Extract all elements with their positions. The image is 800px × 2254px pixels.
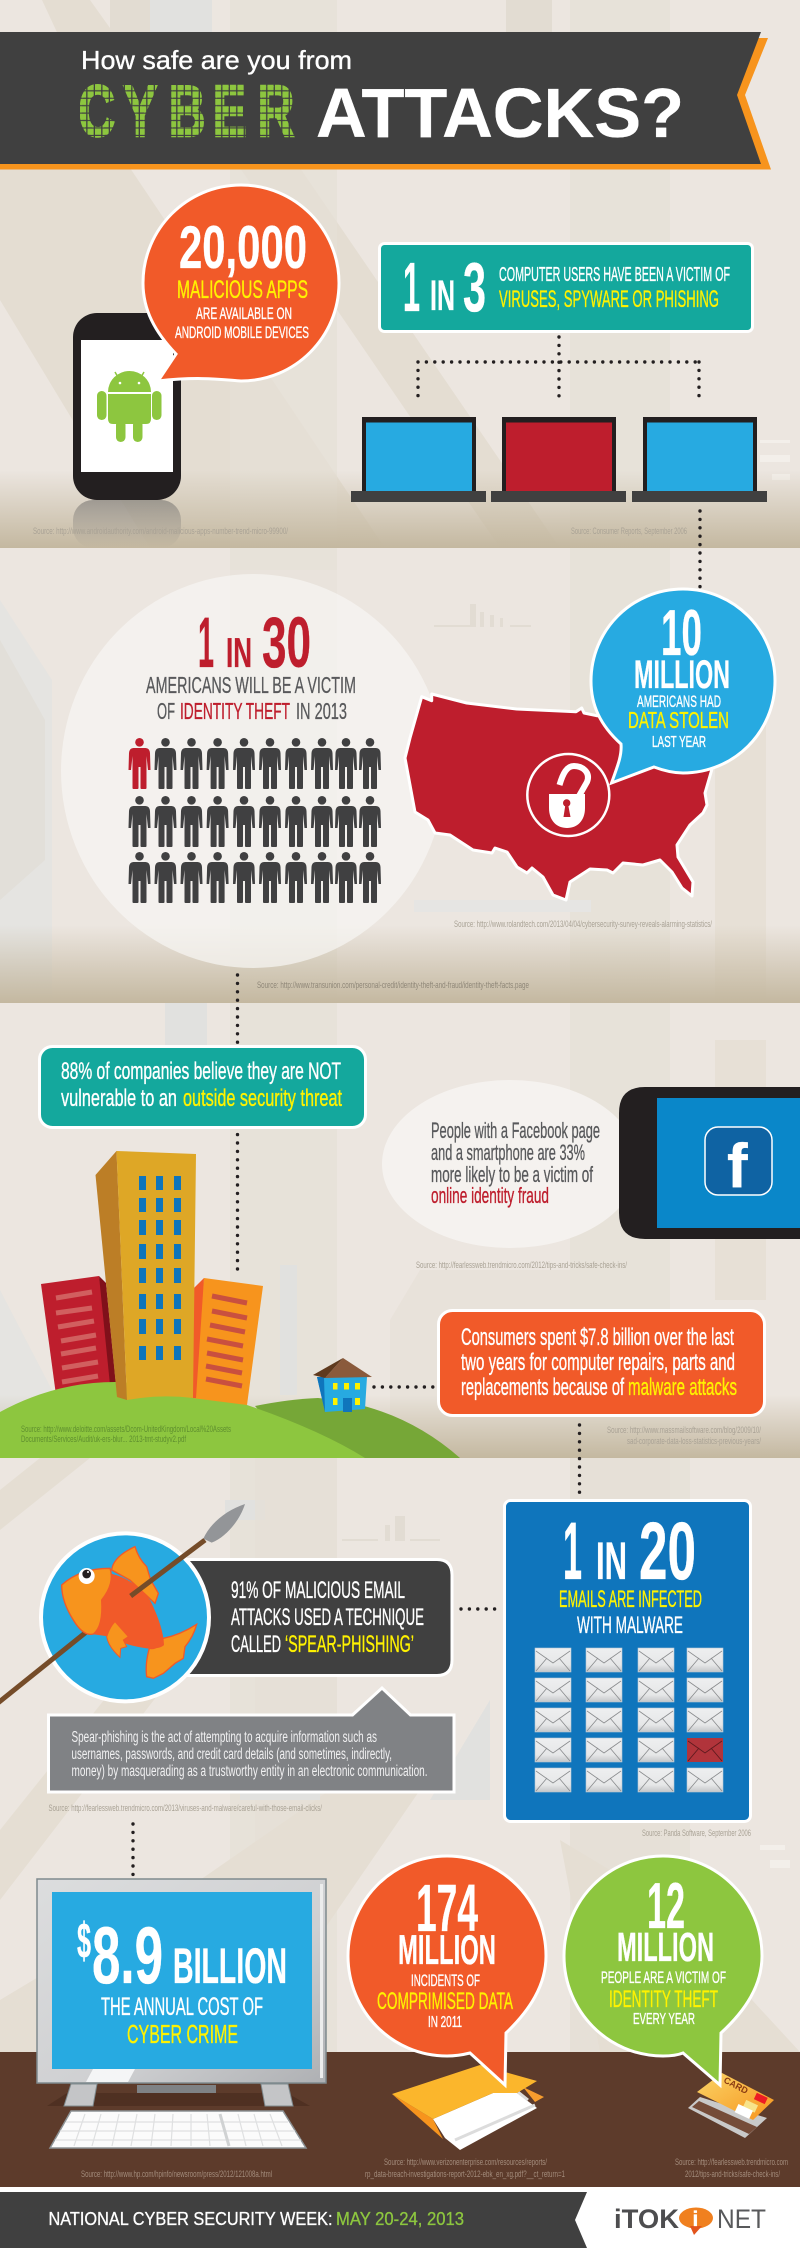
callout: spear-phishing definition: usernames, passwords, and credit card details (and sometimes, indirectly, [72,1746,392,1763]
callout: 174 million: COMPRIMISED DATA [377,1988,513,2015]
pictogram: people [128,738,381,903]
callout: spear-phishing definition: money) by masquerading as a trustworthy entity in an electronic communication. [72,1763,427,1780]
source: Documents/Services/Audit/uk-ers-blur... 2013-tmt-studyv2.pdf [21,1434,186,1445]
logo: itoki.net: i [692,2208,698,2231]
panel: 1 in 30: 30 [262,604,311,683]
callout: 12 million [564,1856,762,2085]
illustration: desktop computer [37,1879,326,2148]
source [675,2157,788,2180]
icon: three laptops [351,417,767,502]
source: Source: http://www.hp.com/hpinfo/newsroom/press/2012/121008a.html [81,2169,272,2180]
callout: 174 million: 174 [416,1871,478,1946]
callout: facebook fraud: more likely to be a victim of [431,1162,594,1187]
panel: android phone [73,313,181,548]
icon: house [313,1358,372,1412]
source: Source: http://www.verizonenterprise.com/resources/reports/ [384,2157,547,2168]
icon: credit cards [688,2073,774,2138]
icon: tablet with facebook [619,1087,800,1239]
callout: 20,000 malicious apps: ANDROID MOBILE DEVICES [175,323,309,342]
callout: 10 million [591,589,775,783]
icon: open padlock [527,754,609,836]
source: Source: http://www.deloitte.com/assets/Dcom-UnitedKingdom/Local%20Assets [21,1424,231,1435]
logo: itoki.net [614,2204,766,2235]
logo: itoki.net: NET [717,2204,766,2234]
footer banner: MAY 20-24, 2013 [336,2209,464,2229]
panel: 1 in 20 emails [504,1500,750,1822]
panel: 1 in 20 emails: 1 [563,1506,582,1597]
callout: 12 million: MILLION [617,1924,714,1970]
callout: 12 million: EVERY YEAR [633,2011,695,2028]
callout: 20,000 malicious apps: ARE AVAILABLE ON [196,304,292,323]
keyboard [50,2111,306,2148]
footer area [0,2187,800,2254]
callout: 20,000 malicious apps [143,185,339,381]
panel: 1 in 3: 1 [403,248,420,326]
callout: 91% spear-phishing: CALLED [231,1631,281,1658]
callout: 88% of companies: 88% of companies believe they are NOT [61,1058,341,1085]
callout: 10 million: LAST YEAR [652,734,706,751]
icon: credit cards: CARD [722,2075,750,2096]
callout: 88% of companies: vulnerable to an [61,1085,177,1112]
panel: 1 in 20 emails: WITH MALWARE [577,1612,683,1639]
callout: 91% spear-phishing: ‘SPEAR-PHISHING’ [285,1631,414,1658]
callout: facebook fraud [382,1080,638,1248]
desk floor [0,2052,800,2187]
callout: 174 million: INCIDENTS OF [411,1971,480,1990]
icon: envelopes [535,1648,723,1792]
icon: fish and spear [0,1504,245,1703]
callout: 174 million: MILLION [398,1926,496,1973]
panel: 1 in 3: IN [430,272,455,320]
panel: 1 in 20 emails: 20 [639,1506,696,1597]
illustration: city buildings and hills [0,1151,460,1458]
callout: consumers spent: replacements because of [461,1374,624,1401]
panel: 1 in 30: 1 [198,604,214,683]
title banner [0,32,771,170]
illustration: desktop computer: CYBER CRIME [127,2019,238,2049]
callout: 174 million: IN 2011 [428,2014,462,2031]
panel: 1 in 30: AMERICANS WILL BE A VICTIM [146,672,356,698]
source [607,1425,761,1447]
title line: how safe: How safe are you from [81,45,352,75]
footer banner [0,2192,587,2248]
callout: spear-phishing definition [48,1688,454,1792]
panel: 1 in 30: IN 2013 [296,698,347,724]
callout: 10 million: AMERICANS HAD [637,692,721,711]
dotted connectors [133,337,700,1876]
callout: 174 million [348,1856,546,2085]
callout: spear-phishing definition: Spear-phishing is the act of attempting to acquire information such as [72,1729,377,1746]
callout: 10 million: 10 [661,596,702,669]
source [365,2157,565,2180]
source: Source: http://fearlessweb.trendmicro.com/2013/viruses-and-malware/careful-with-those-email-clicks/ [48,1803,322,1814]
callout: 91% spear-phishing [170,1560,452,1676]
source: Source: http://www.androidauthority.com/android-malicious-apps-number-trend-micro-99900/ [33,526,288,537]
callout: 91% spear-phishing: 91% OF MALICIOUS EMAIL [231,1577,405,1604]
callout: facebook fraud: and a smartphone are 33% [431,1140,585,1165]
panel: 1 in 30 [61,574,445,968]
title word: cyber: CYBER [78,71,294,152]
callout: facebook fraud: online identity fraud [431,1183,549,1208]
logo: itoki.net: iTOK [614,2204,679,2234]
callout: 20,000 malicious apps: MALICIOUS APPS [177,276,308,304]
panel: 1 in 30: IN [226,629,252,676]
callout: facebook fraud: People with a Facebook page [431,1118,600,1143]
callout: consumers spent [438,1310,764,1416]
panel: 1 in 3: 3 [463,248,486,326]
illustration: desktop computer: THE ANNUAL COST OF [101,1993,263,2021]
callout: 12 million: 12 [647,1869,685,1942]
icon: android [97,371,162,442]
callout: 88% of companies [40,1046,366,1128]
source: Source: http://www.transunion.com/personal-credit/identity-theft-and-fraud/identity-theft-facts.page [257,980,529,991]
illustration: desktop computer: 8.9 [92,1911,163,2001]
callout: 20,000 malicious apps: 20,000 [179,214,307,281]
icon: folder of documents [392,2065,544,2150]
illustration: desktop computer: $ [77,1913,91,1969]
panel: 1 in 3 [380,244,752,332]
footer banner: NATIONAL CYBER SECURITY WEEK: [48,2209,332,2229]
panel: 1 in 30: IDENTITY THEFT [180,698,290,724]
illustration: desktop computer: BILLION [173,1938,287,1994]
source: rp_data-breach-investigations-report-2012-ebk_en_xg.pdf?__ct_return=1 [365,2169,565,2180]
callout: 91% spear-phishing: ATTACKS USED A TECHNIQUE [231,1604,424,1631]
callout: 12 million: IDENTITY THEFT [609,1986,718,2013]
icon: tablet with facebook: f [727,1132,748,1201]
callout: consumers spent: malware attacks [628,1374,737,1401]
callout: 88% of companies: outside security threat [183,1085,342,1112]
source: Source: http://fearlessweb.trendmicro.com/2012/tips-and-tricks/safe-check-ins/ [416,1260,627,1271]
panel: 1 in 20 emails: IN [596,1532,627,1591]
callout: 10 million: DATA STOLEN [628,707,729,733]
map: united states [405,694,712,900]
source: Source: Consumer Reports, September 2006 [571,526,687,537]
source [21,1424,231,1445]
panel: 1 in 30: OF [157,698,175,724]
callout: 10 million: MILLION [634,653,730,697]
title word: attacks: ATTACKS? [316,74,684,152]
